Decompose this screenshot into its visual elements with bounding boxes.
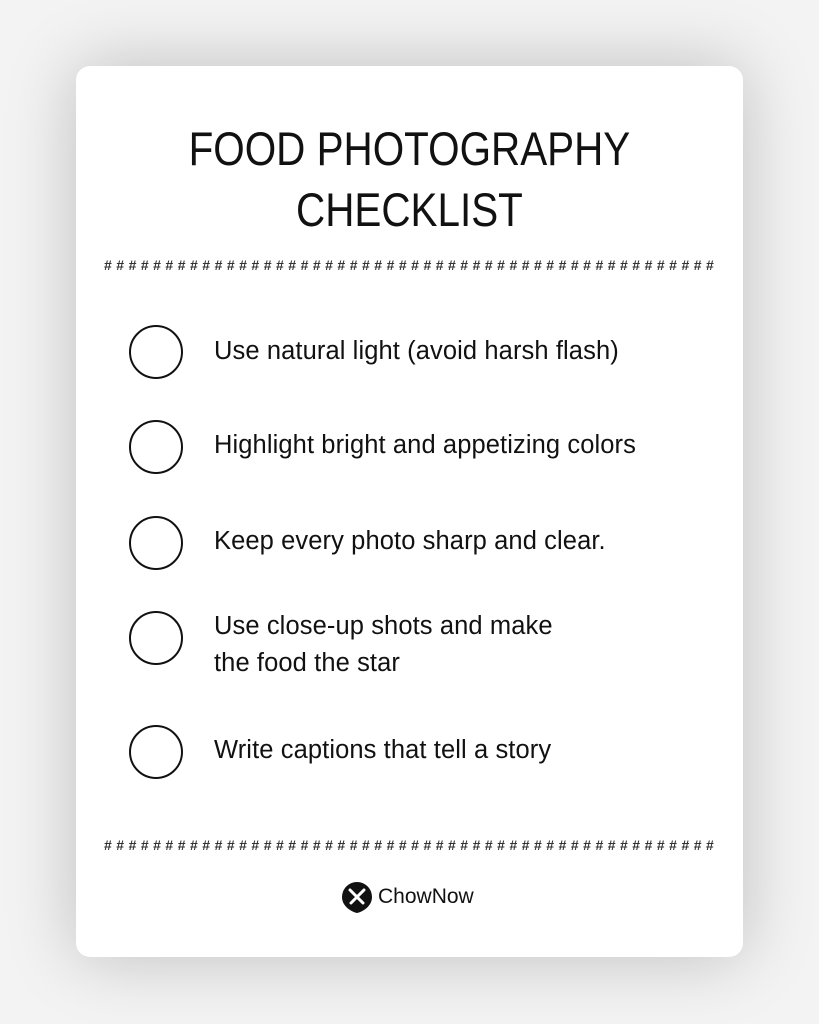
item text: Write captions that tell a story bbox=[214, 736, 551, 764]
item 3 bbox=[129, 516, 606, 570]
item text: the food the star bbox=[214, 649, 400, 677]
item text: Highlight bright and appetizing colors bbox=[214, 431, 636, 459]
item 1 bbox=[129, 325, 619, 379]
checkbox circle bbox=[129, 611, 183, 665]
bottom hash divider: ################################################## bbox=[104, 837, 716, 853]
brand name: ChowNow bbox=[378, 885, 474, 908]
item text: Use natural light (avoid harsh flash) bbox=[214, 337, 619, 365]
checkbox circle bbox=[129, 420, 183, 474]
top hash divider: ################################################## bbox=[104, 257, 716, 273]
item text: Keep every photo sharp and clear. bbox=[214, 527, 606, 555]
title bbox=[189, 122, 630, 236]
title: CHECKLIST bbox=[296, 183, 523, 236]
item 4 bbox=[129, 611, 553, 677]
card panel bbox=[76, 66, 743, 957]
item text: Use close-up shots and make bbox=[214, 612, 553, 640]
item 5 bbox=[129, 725, 551, 779]
checkbox circle bbox=[129, 516, 183, 570]
title: FOOD PHOTOGRAPHY bbox=[189, 122, 630, 175]
checkbox circle bbox=[129, 325, 183, 379]
item 2 bbox=[129, 420, 636, 474]
checkbox circle bbox=[129, 725, 183, 779]
logo bbox=[342, 882, 474, 913]
icon: chownow pin bbox=[342, 882, 372, 913]
item text bbox=[214, 612, 553, 677]
